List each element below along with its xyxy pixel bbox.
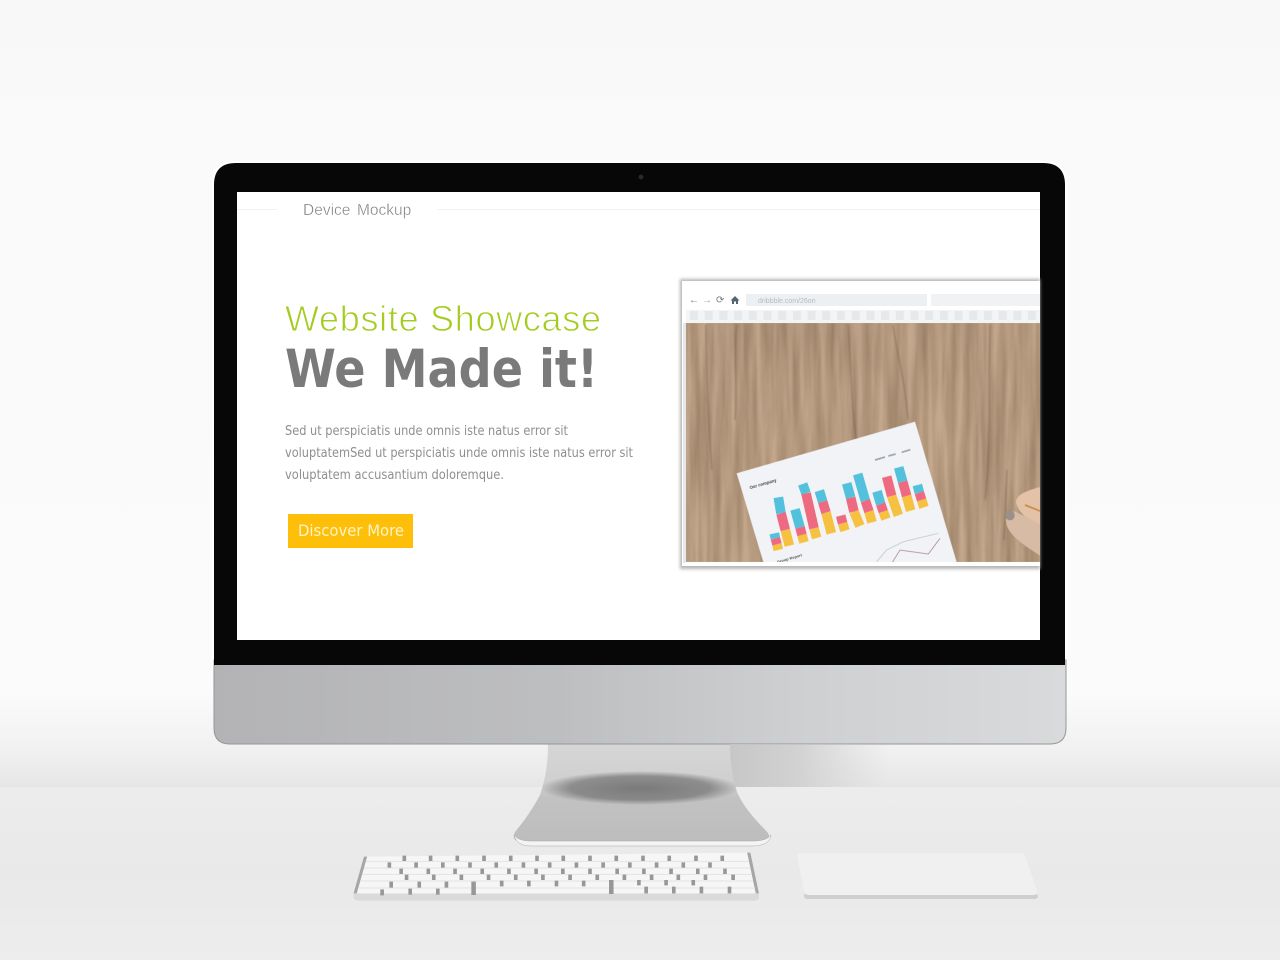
- address bar: [746, 294, 927, 306]
- hand holding pen: [1005, 487, 1042, 557]
- desk surface: [0, 787, 1280, 960]
- photo: wooden desk with printed chart: [686, 323, 1042, 573]
- back arrow: ←: [689, 295, 699, 306]
- trackpad surface: [797, 853, 1037, 895]
- stand neck and foot: [514, 744, 769, 842]
- body text: Sed ut perspiciatis unde omnis iste natus error sit: [285, 424, 568, 439]
- monitor shadow on wall: [725, 745, 890, 787]
- pen: [1025, 505, 1042, 512]
- keyboard keys surface: [354, 853, 759, 893]
- chart legend: [875, 450, 910, 460]
- frame inner left edge: [683, 323, 686, 563]
- pink trend line: [892, 538, 940, 563]
- second chart title: Group Report: [776, 552, 803, 564]
- wood grain: [686, 323, 1040, 562]
- paper sheet: [737, 422, 960, 573]
- dark wood cracks: [706, 325, 1007, 540]
- bookmark placeholders: [690, 311, 1040, 321]
- subtitle: Website Showcase: [285, 298, 601, 339]
- header label: Device: [303, 202, 350, 219]
- home icon: [730, 296, 740, 304]
- button: Discover More: Discover More: [298, 521, 404, 540]
- bookmarks row: [686, 310, 1040, 323]
- address text: dribbble.com/26on: [758, 298, 816, 305]
- yellow bar segments: [777, 496, 924, 550]
- line chart on paper: [877, 533, 940, 563]
- bezel outer highlight: [212, 161, 1067, 670]
- monitor: [212, 161, 1067, 744]
- main heading: We Made it!: [285, 339, 598, 400]
- bar chart on paper: [774, 467, 924, 550]
- forward arrow: →: [702, 295, 712, 306]
- header divider left: [237, 209, 277, 210]
- frame shadow: [680, 279, 1040, 569]
- silver chin: [214, 660, 1066, 744]
- printed report, drawn in photo pixels: [737, 422, 1042, 573]
- keyboard body edge: [354, 893, 759, 901]
- blue bar segments: [774, 467, 919, 538]
- red bar segments: [775, 477, 922, 544]
- trackpad edge: [804, 894, 1038, 899]
- webcam: [639, 175, 643, 179]
- body text: voluptatem accusantium doloremque.: [285, 468, 504, 483]
- screen: [237, 192, 1040, 640]
- trackpad: [797, 853, 1038, 899]
- key row separators: [359, 861, 755, 888]
- chart title: Our company: [749, 477, 778, 490]
- keyboard: [354, 853, 759, 901]
- wood base: [686, 323, 1040, 562]
- browser frame: [682, 281, 1040, 566]
- header label: Mockup: [357, 202, 411, 219]
- key gaps: [380, 856, 735, 895]
- reload icon: ⟳: [716, 295, 725, 306]
- upper finger: [1016, 487, 1040, 524]
- left and right metal sides: [354, 853, 759, 893]
- shadow band across stand: [540, 771, 740, 805]
- website screenshot: [680, 279, 1042, 573]
- lower finger: [1006, 511, 1042, 557]
- fingernail: [1005, 510, 1015, 520]
- body text: [285, 424, 633, 483]
- grey trend line: [877, 533, 938, 562]
- black bezel: [214, 163, 1065, 665]
- body text: voluptatemSed ut perspiciatis unde omnis iste natus error sit: [285, 446, 633, 461]
- second toolbar field: [931, 294, 1040, 306]
- monitor stand: [514, 744, 771, 846]
- button: Discover More: [288, 514, 413, 548]
- stand polished edge: [514, 835, 771, 846]
- header divider right: [437, 209, 1040, 210]
